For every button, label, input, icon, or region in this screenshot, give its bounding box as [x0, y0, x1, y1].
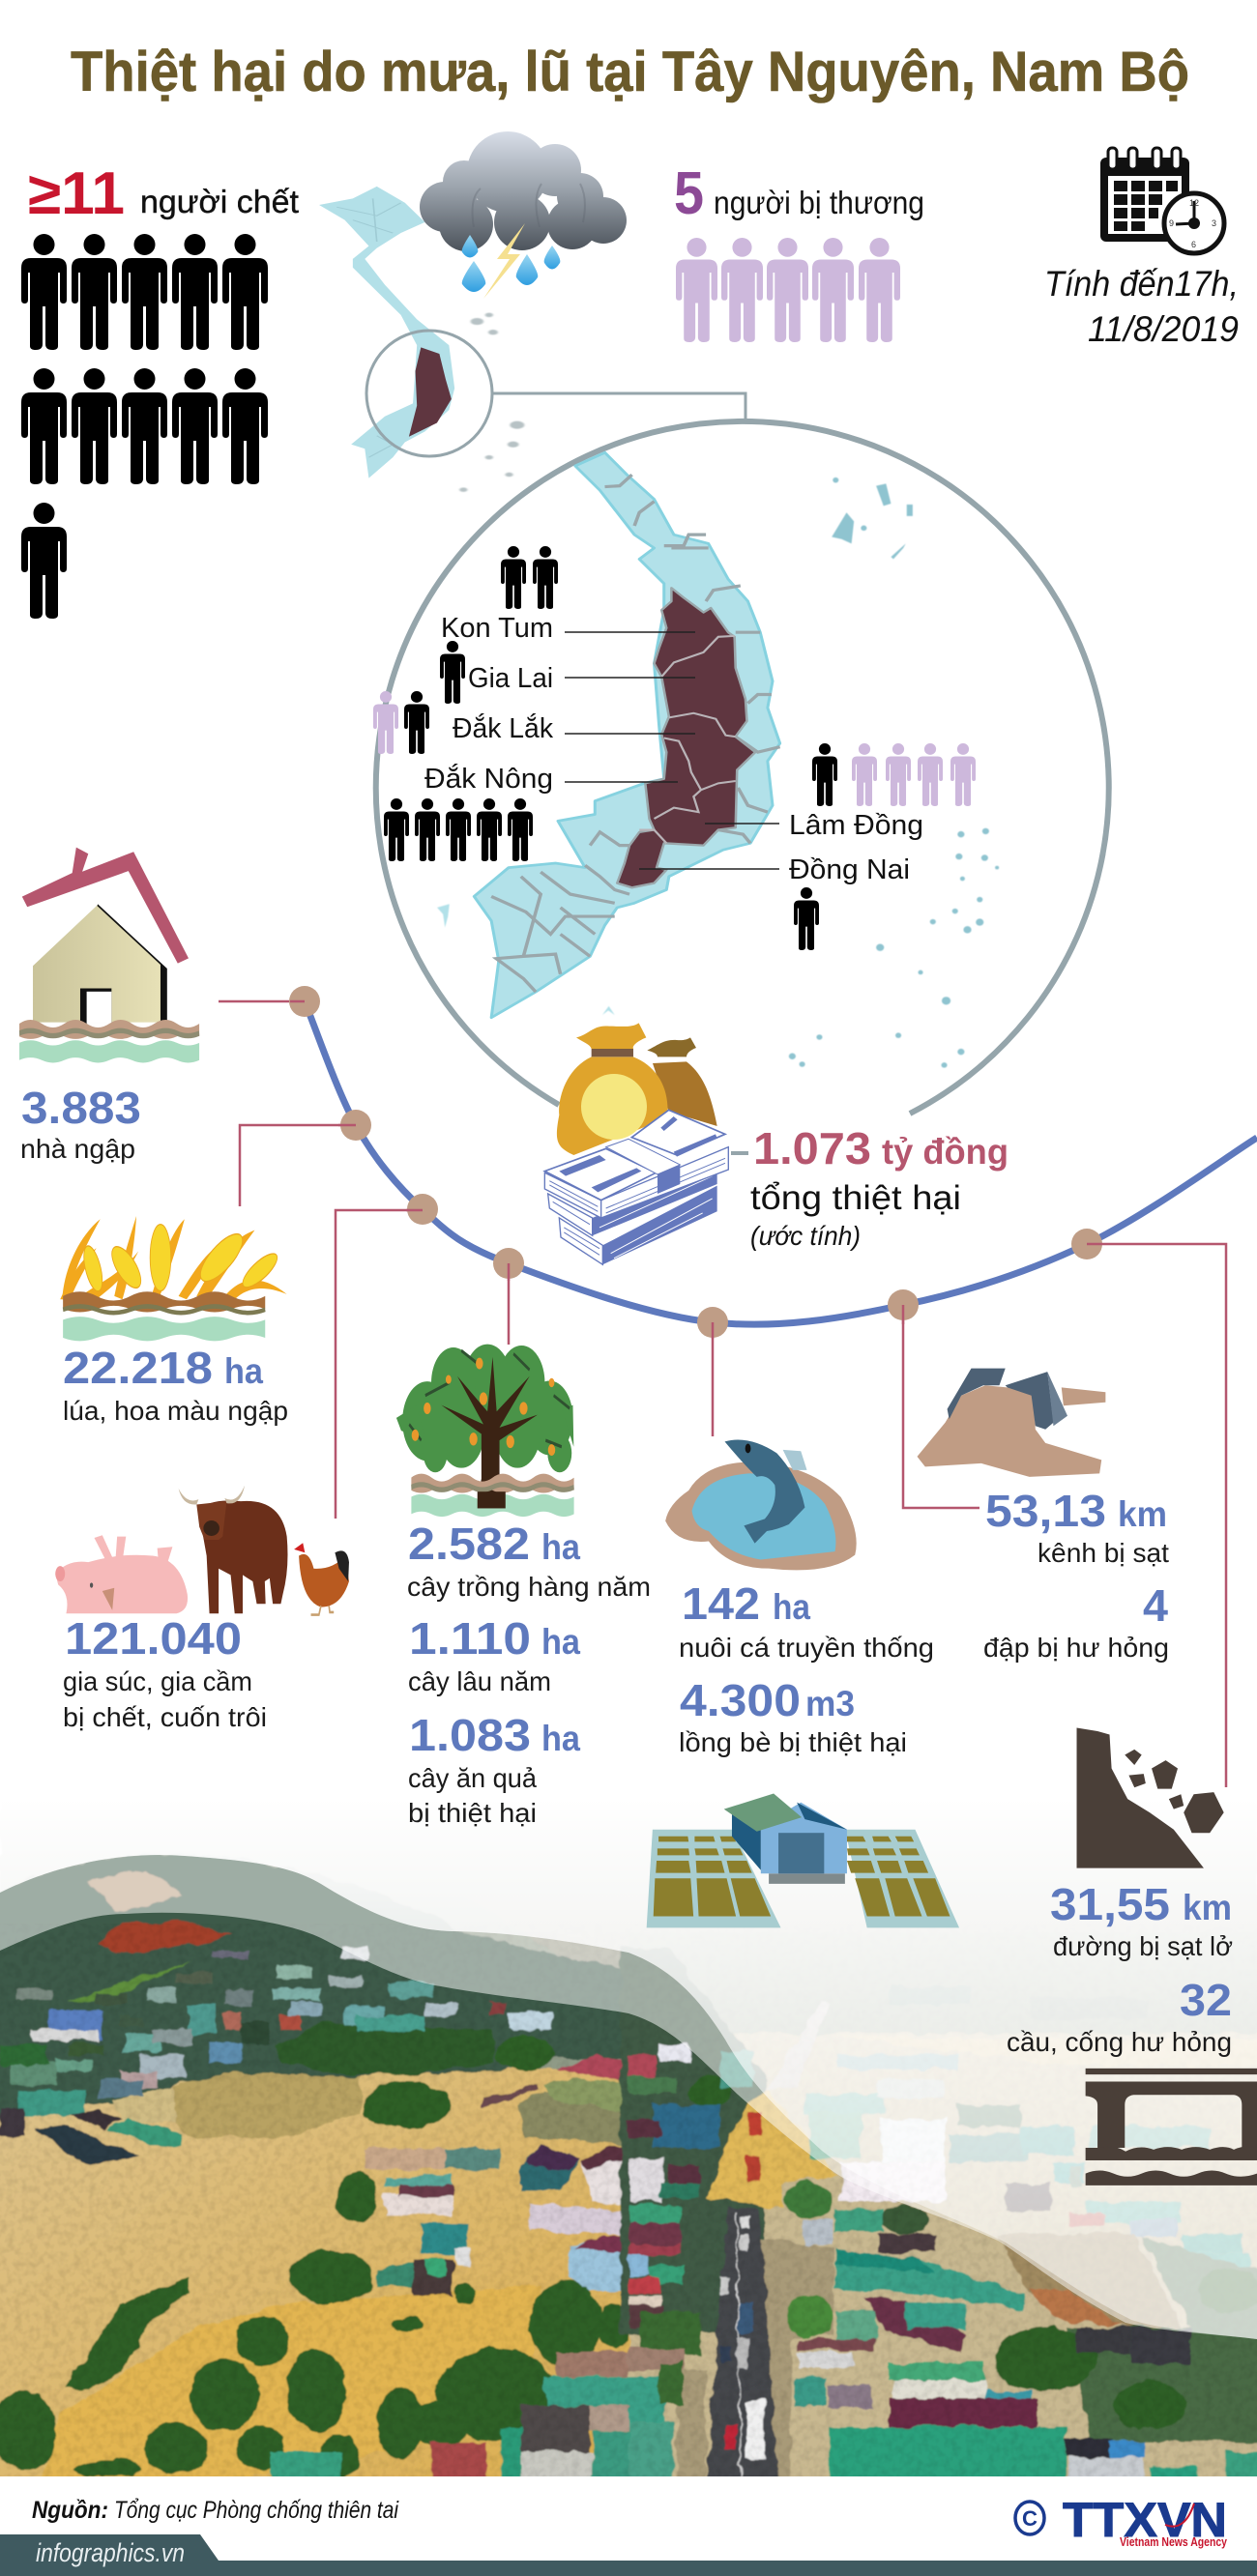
stat: canal and dams: đập bị hư hỏng: [983, 1633, 1169, 1663]
icon: lightning: [483, 223, 525, 299]
stat: rice: lúa, hoa màu ngập: [63, 1396, 288, 1426]
photo right half: [621, 1933, 1257, 2491]
stat: rice: [63, 1343, 288, 1426]
stat: fish: m3: [805, 1684, 855, 1723]
source line: Nguồn:: [32, 2497, 108, 2524]
stat: canal and dams: km: [1118, 1494, 1167, 1534]
icon: flooded fruit tree: [396, 1345, 574, 1517]
stat: fish: [679, 1578, 934, 1757]
stat: crops: 2.582: [408, 1519, 530, 1569]
stat: crops: ha: [541, 1622, 580, 1662]
icon: calendar and clock: 3: [1212, 218, 1216, 228]
photo left half: [0, 1933, 636, 2491]
middle stack: [548, 1194, 593, 1235]
hillside above the photo seam: [0, 1855, 1257, 2061]
stat: livestock: 121.040: [65, 1613, 242, 1664]
icon: bridge: [1086, 2069, 1257, 2185]
stat: livestock: bị chết, cuốn trôi: [63, 1702, 267, 1732]
lower stack: [559, 1218, 602, 1264]
pig: [55, 1535, 188, 1613]
panel: big zoom circle: [373, 421, 1109, 1151]
icon: landslide: [1077, 1727, 1224, 1868]
stat: canal and dams: 53,13: [985, 1486, 1106, 1536]
small map of Vietnam: [319, 187, 524, 492]
province labels: Lâm Đồng: [789, 810, 923, 841]
province labels: Đắk Nông: [424, 763, 553, 795]
icon: calendar and clock: [1100, 148, 1224, 253]
stat: roads and bridges: đường bị sạt lở: [1053, 1931, 1233, 1961]
injured count: 5: [674, 160, 704, 227]
stat: crops: [407, 1519, 651, 1828]
map: south Vietnam: [437, 452, 999, 1068]
logo: TTXVN: TTXVN: [1063, 2493, 1227, 2547]
injured pictogram: [676, 238, 900, 342]
chicken: [294, 1543, 349, 1615]
timeline arc: [305, 1001, 1257, 1324]
icon: flooded rice: [60, 1216, 287, 1341]
icon: flooded house: [19, 848, 199, 1062]
icon: calendar and clock: 6: [1191, 240, 1196, 249]
highlighted provinces: [617, 588, 755, 887]
zoom connector: [366, 331, 745, 456]
stat: crops: 1.110: [409, 1613, 531, 1664]
source line: [32, 2497, 399, 2524]
stat: roads and bridges: 32: [1180, 1975, 1232, 2025]
stat: canal and dams: kênh bị sạt: [1038, 1538, 1169, 1568]
province labels: Kon Tum: [441, 613, 553, 644]
total value: 1.073: [753, 1123, 871, 1173]
stat: fish: nuôi cá truyền thống: [679, 1633, 934, 1663]
icon: calendar and clock: 9: [1169, 218, 1174, 228]
stat: houses: [20, 1083, 141, 1164]
stat: canal and dams: 4: [1143, 1580, 1168, 1631]
stat: roads and bridges: 31,55: [1050, 1879, 1170, 1929]
icon: broken canal: [918, 1369, 1105, 1477]
website: infographics.vn: [36, 2538, 185, 2567]
stat: fish: lồng bè bị thiệt hại: [679, 1727, 907, 1757]
stat: roads and bridges: cầu, cống hư hỏng: [1007, 2027, 1232, 2057]
date text: Tính đến17h,: [1044, 264, 1239, 304]
cash leader: [731, 1151, 748, 1155]
logo: TTXVN: C: [1022, 2506, 1038, 2531]
logo: TTXVN: Vietnam News Agency: [1120, 2534, 1228, 2549]
stat: rice: ha: [224, 1351, 263, 1391]
icon: calendar and clock: 12: [1189, 198, 1199, 208]
title: Thiệt hại do mưa, lũ tại Tây Nguyên, Nam Bộ: [71, 41, 1189, 103]
stat: crops: cây trồng hàng năm: [407, 1572, 651, 1602]
panel: deaths: [21, 160, 299, 619]
total unit: tỷ đồng: [882, 1132, 1009, 1172]
stat: houses: nhà ngập: [20, 1134, 135, 1164]
stat: fish: 142: [682, 1578, 760, 1629]
estimate note: (ước tính): [750, 1221, 861, 1251]
stat: livestock: gia súc, gia cầm: [63, 1666, 252, 1696]
bull: [179, 1486, 288, 1613]
stat: roads and bridges: [1007, 1879, 1233, 2057]
province leader lines: [565, 632, 779, 869]
total label: tổng thiệt hại: [750, 1179, 961, 1217]
province labels: Đắk Lắk: [453, 712, 553, 744]
source line: Tổng cục Phòng chống thiên tai: [114, 2497, 399, 2524]
deaths label: người chết: [140, 184, 299, 219]
flood aerial photo background: [0, 1855, 1257, 2476]
islands: [437, 478, 999, 1068]
fog overlays: [0, 1798, 1257, 2339]
stat: rice: 22.218: [63, 1343, 213, 1393]
stat: houses: 3.883: [21, 1083, 141, 1133]
stat: crops: cây ăn quả: [408, 1763, 537, 1793]
upper stack: [544, 1172, 601, 1218]
stat: crops: 1.083: [409, 1710, 531, 1760]
stat: crops: cây lâu năm: [408, 1666, 551, 1696]
injured label: người bị thương: [714, 185, 924, 220]
icon: rain drops: [462, 235, 560, 292]
date text: [1044, 264, 1239, 349]
deaths count: ≥11: [28, 160, 125, 227]
stat: livestock: [63, 1613, 267, 1732]
icon: pig, bull and chicken: [55, 1486, 349, 1615]
date text: 11/8/2019: [1088, 309, 1239, 349]
stat: crops: bị thiệt hại: [408, 1798, 537, 1828]
stat: canal and dams: [983, 1486, 1169, 1663]
province labels: [424, 613, 923, 885]
province labels: Gia Lai: [468, 663, 553, 694]
panel: injured: [674, 160, 924, 342]
icon: storm cloud: [420, 131, 627, 299]
stat: fish: ha: [773, 1587, 810, 1627]
footer bar: [0, 2534, 1257, 2576]
stat: crops: ha: [541, 1527, 580, 1567]
icon: fish pond: [665, 1440, 857, 1570]
deaths pictogram: [21, 234, 268, 619]
icon: money bags and cash: [544, 1023, 728, 1264]
icon: fish cage farm: [647, 1794, 959, 1927]
timeline nodes: [289, 986, 1102, 1338]
province casualty pictograms: [373, 546, 976, 950]
stat: fish: 4.300: [680, 1675, 801, 1725]
province labels: Đồng Nai: [789, 854, 910, 885]
total damage: [731, 1123, 1009, 1251]
connector lines: [219, 1001, 1226, 1787]
stat: roads and bridges: km: [1183, 1888, 1232, 1927]
stat: crops: ha: [541, 1719, 580, 1758]
province lines: [491, 475, 780, 992]
